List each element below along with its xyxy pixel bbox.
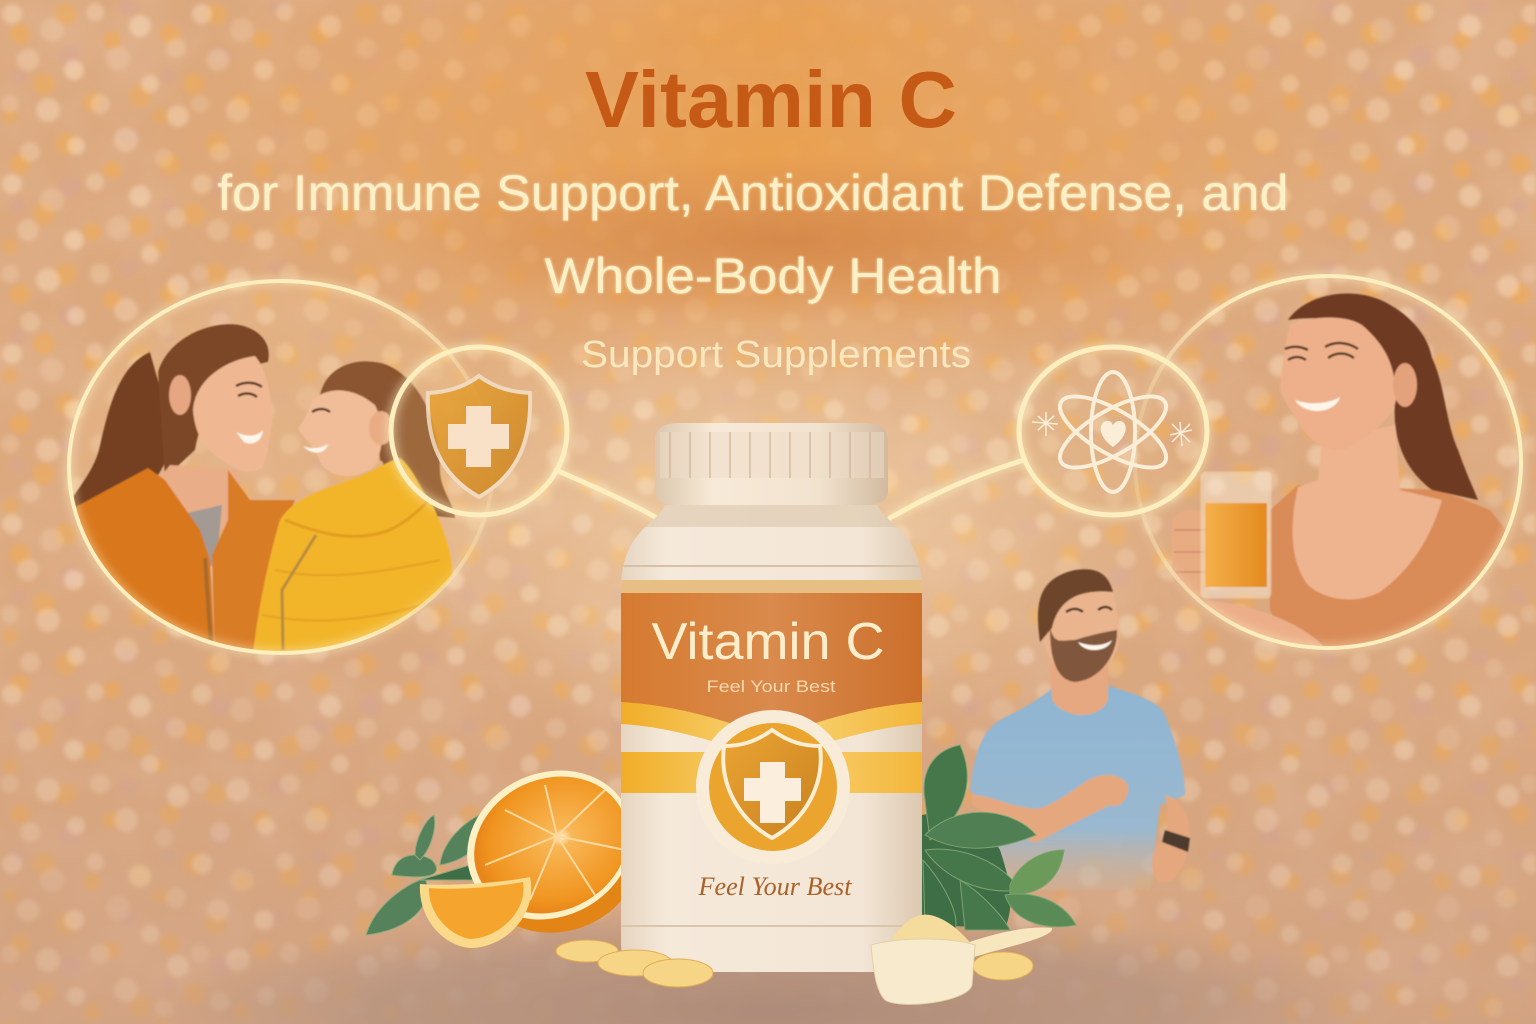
figure: man jogging: [970, 569, 1190, 890]
subtitle line 1: for Immune Support, Antioxidant Defense, and: [218, 165, 1288, 221]
bottle label: [621, 505, 922, 927]
subtitle line 2: Whole-Body Health: [544, 248, 1002, 304]
glowing ring: [69, 281, 493, 653]
icon: antioxidant atom in ring: [1019, 347, 1207, 515]
softgel pills: [556, 940, 1033, 987]
measuring scoop with powder: [871, 915, 1052, 1004]
title: Vitamin C: [585, 55, 957, 144]
connector: atom to bottle: [890, 460, 1024, 518]
panel: mother and daughter: [60, 281, 493, 670]
figure: woman drinking juice: [1172, 294, 1506, 650]
label tagline: Feel Your Best: [706, 677, 836, 696]
figures: mother and daughter: [74, 287, 456, 651]
label name: Vitamin C: [652, 613, 884, 671]
glowing ring: [1135, 276, 1521, 648]
leaves: right mint sprig: [922, 745, 1076, 930]
icon: immune shield in ring: [391, 347, 567, 515]
product bottle: [621, 423, 922, 972]
label script slogan: Feel Your Best: [697, 872, 852, 901]
panel: woman with juice: [1135, 276, 1521, 650]
orange half: [443, 744, 658, 954]
orange wedge: [420, 877, 531, 948]
tagline: Support Supplements: [581, 334, 971, 376]
connector: shield to bottle: [556, 470, 655, 517]
bottle body: [621, 505, 922, 972]
leaves: left mint sprig: [366, 810, 493, 935]
bottle cap: [655, 423, 888, 505]
label emblem: [696, 710, 850, 864]
